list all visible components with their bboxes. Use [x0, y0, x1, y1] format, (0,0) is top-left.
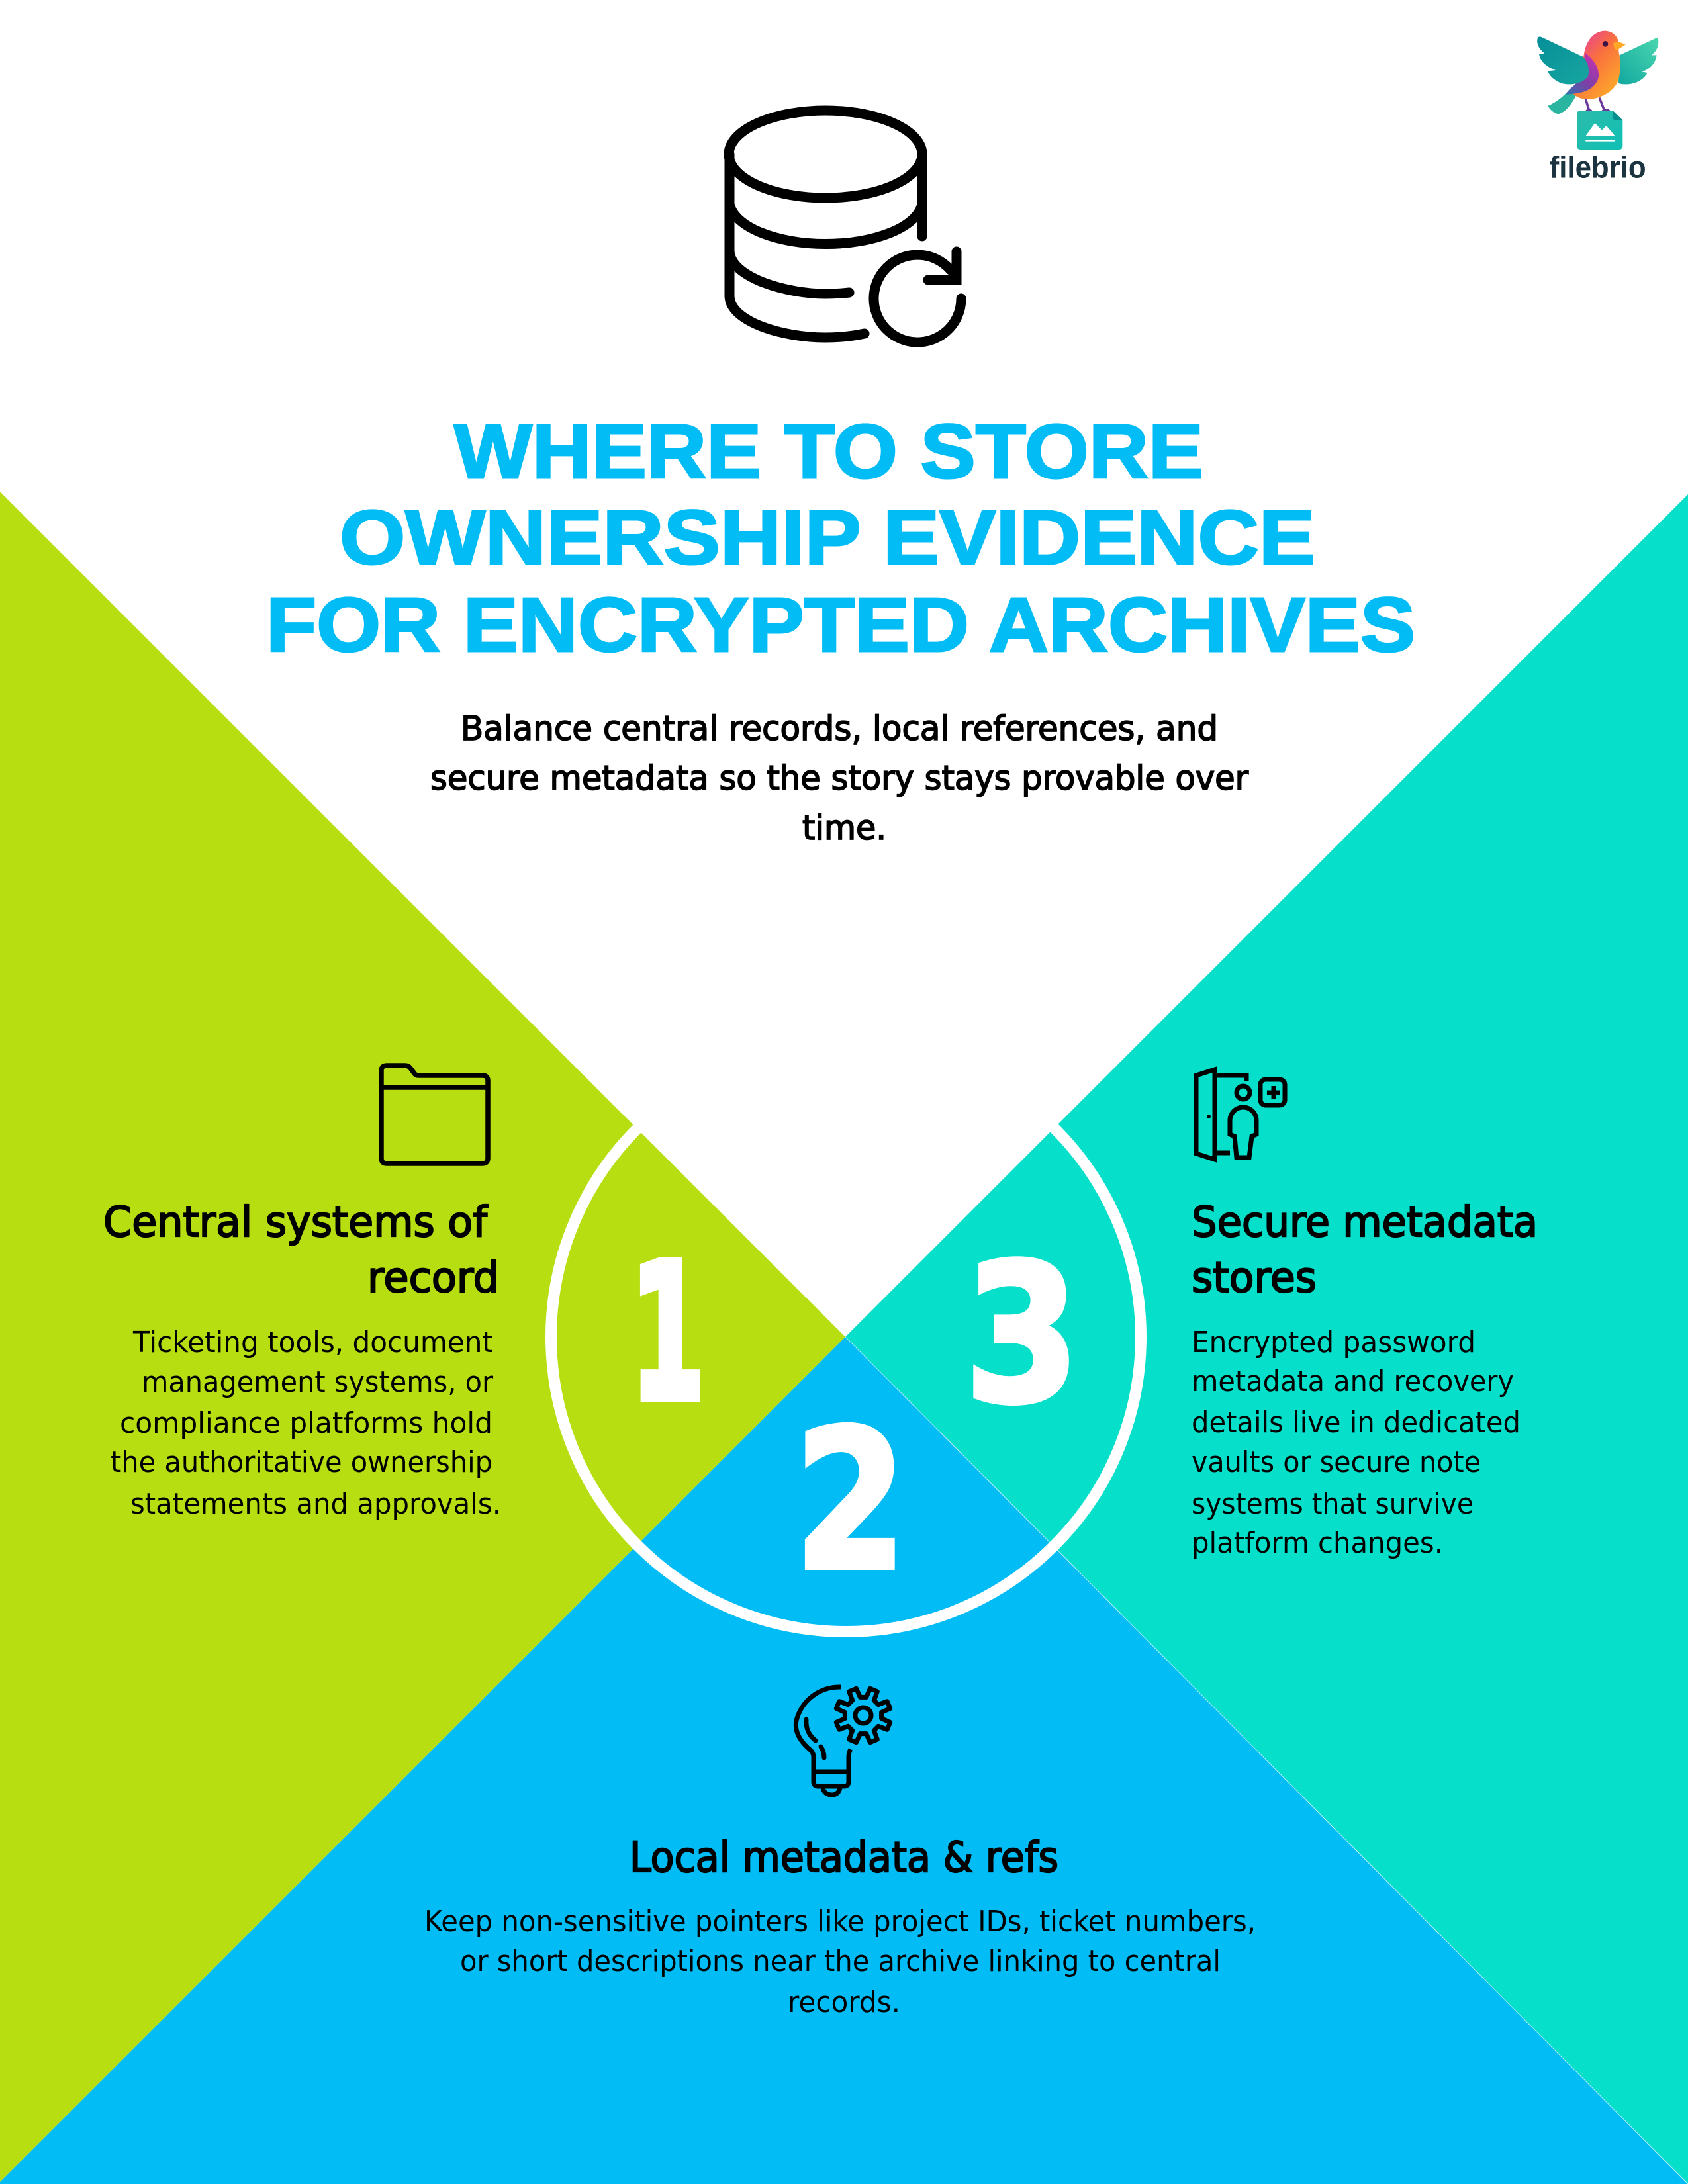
icon: folder — [381, 1066, 488, 1163]
title: OWNERSHIP EVIDENCE — [340, 494, 1315, 580]
number 3: 3 — [964, 1223, 1080, 1445]
text: central systems description: management systems, or — [142, 1365, 494, 1399]
icon: file — [1577, 111, 1622, 150]
text: central systems description: compliance platforms hold — [120, 1406, 492, 1440]
icon: file mountains — [1585, 123, 1615, 142]
icon: file fold — [1613, 111, 1622, 120]
subtitle: secure metadata so the story stays provable over — [430, 759, 1248, 798]
icon: bird wing band — [1566, 53, 1599, 95]
heading: secure metadata stores: stores — [1192, 1253, 1317, 1302]
logo: filebrio bird on file — [1537, 31, 1658, 184]
icon: bird beak — [1613, 42, 1626, 50]
panel: blue bottom sector — [0, 1337, 1688, 2184]
white ring — [551, 1042, 1141, 1632]
icon: bird tail — [1548, 92, 1577, 114]
text: secure metadata description: Encrypted password — [1192, 1326, 1476, 1359]
text: secure metadata description: systems that survive — [1192, 1487, 1474, 1521]
subtitle — [430, 709, 1248, 848]
text: secure metadata description: platform changes. — [1192, 1526, 1443, 1560]
icon: database with refresh arrow — [729, 111, 961, 342]
text: local metadata description: Keep non-sensitive pointers like project IDs, ticket numbers, — [424, 1905, 1256, 1938]
heading: secure metadata stores: Secure metadata — [1192, 1198, 1538, 1246]
panel: green left sector — [0, 492, 845, 2182]
icon: light bulb with gear — [796, 1687, 890, 1795]
heading: central systems of record: record — [367, 1253, 499, 1302]
icon: bird left wing — [1537, 36, 1589, 84]
text: local metadata description: records. — [788, 1985, 900, 2019]
title — [266, 408, 1415, 668]
subtitle: Balance central records, local references, and — [461, 709, 1218, 749]
heading: secure metadata stores — [1192, 1198, 1538, 1302]
number 1: 1 — [630, 1223, 705, 1442]
icon: bird right wing — [1618, 38, 1658, 84]
icon: bird eye — [1603, 41, 1608, 47]
heading: central systems of record: Central systems of — [103, 1198, 489, 1246]
logo wordmark: filebrio — [1550, 150, 1646, 184]
text: central systems description: statements and approvals. — [130, 1487, 501, 1521]
text: local metadata description: or short descriptions near the archive linking to central — [460, 1944, 1221, 1978]
icon: door and person — [1196, 1069, 1285, 1160]
heading: central systems of record — [103, 1198, 499, 1302]
title: WHERE TO STORE — [454, 408, 1203, 494]
subtitle: time. — [802, 809, 886, 848]
text: secure metadata description: details live in dedicated — [1192, 1406, 1521, 1439]
text: secure metadata description: vaults or secure note — [1192, 1445, 1481, 1479]
panel: teal right sector — [845, 494, 1688, 2184]
icon: bird legs — [1586, 99, 1609, 116]
heading: local metadata and refs: Local metadata & refs — [630, 1833, 1058, 1882]
text: central systems description: Ticketing tools, document — [132, 1326, 493, 1359]
text: central systems description — [111, 1326, 501, 1521]
text: secure metadata description: metadata and recovery — [1192, 1365, 1514, 1398]
title: FOR ENCRYPTED ARCHIVES — [266, 582, 1415, 668]
text: local metadata description — [424, 1905, 1256, 2019]
text: secure metadata description — [1192, 1326, 1521, 1560]
icon: bird body — [1573, 31, 1620, 99]
number 2: 2 — [794, 1389, 907, 1613]
text: central systems description: the authoritative ownership — [111, 1445, 492, 1479]
